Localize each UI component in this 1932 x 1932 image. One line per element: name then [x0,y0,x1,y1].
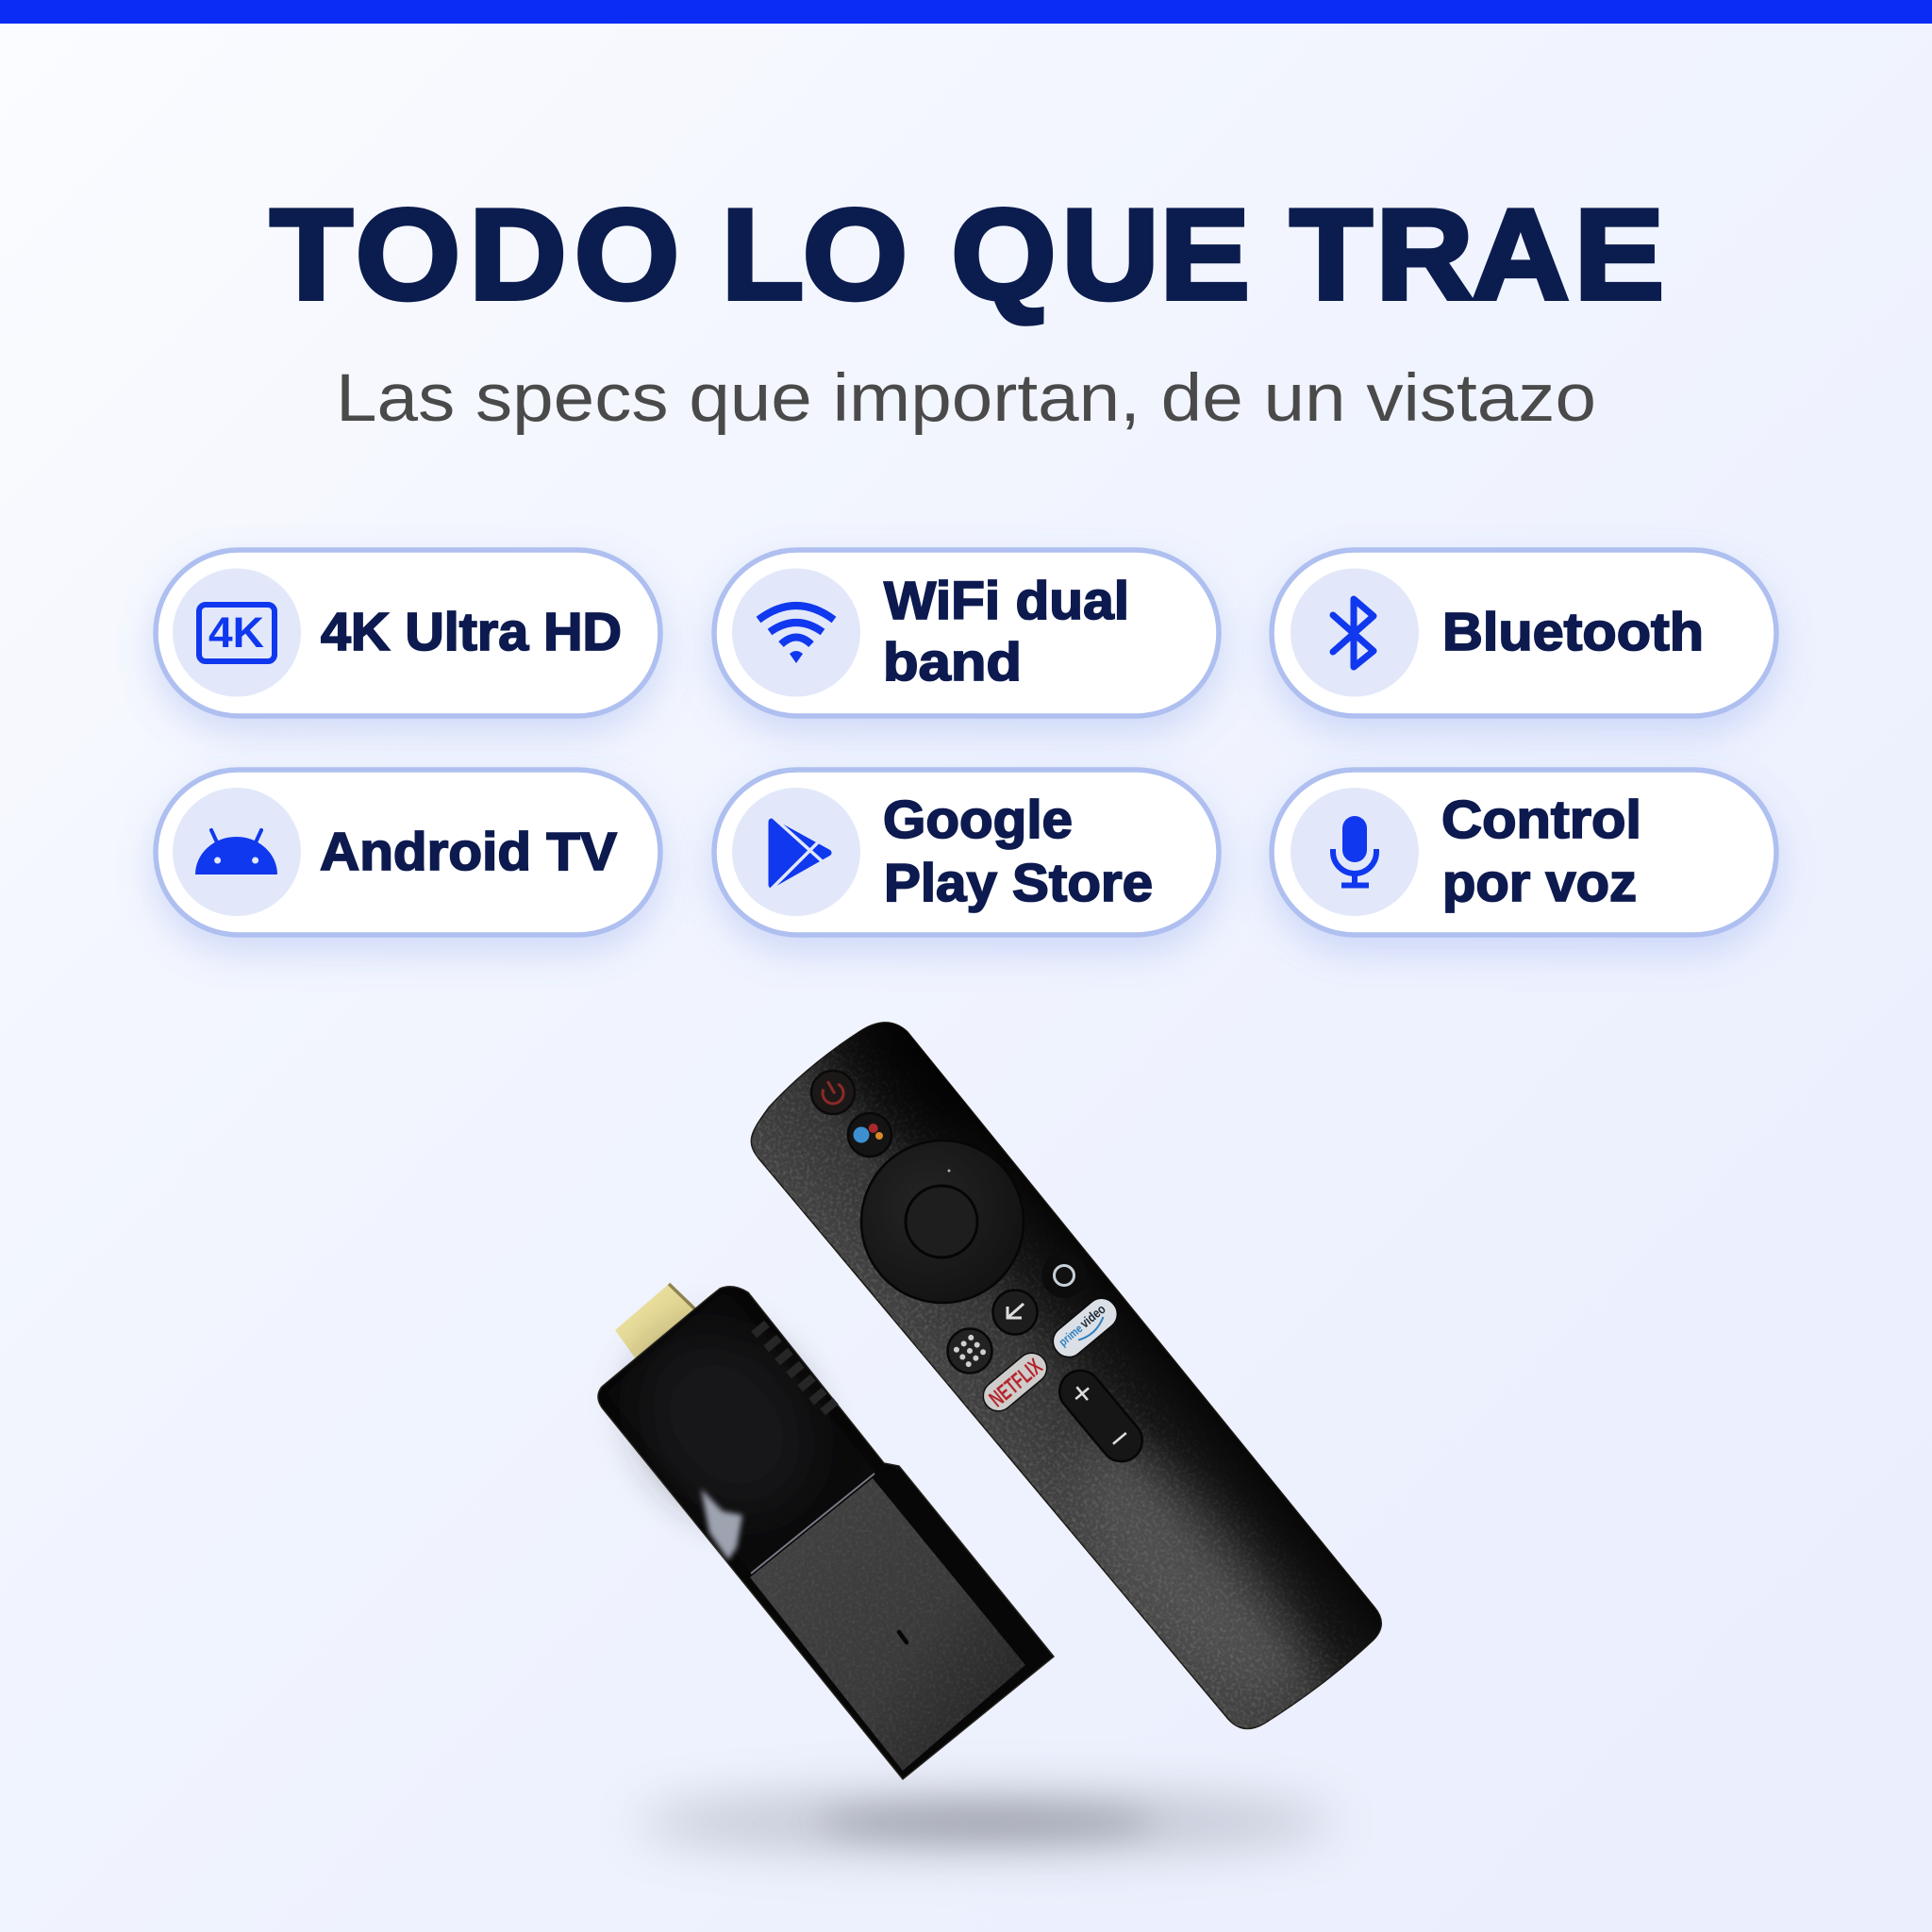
icon circle [1291,568,1419,696]
glossy top face [608,1294,875,1574]
icon: wifi [758,606,834,663]
volume rocker [1051,1362,1151,1470]
icon circle [732,568,860,696]
remote control [751,1022,1382,1730]
icon: 4K [199,605,275,661]
netflix button [977,1347,1053,1417]
panel: Control por voz pill [1272,770,1776,935]
label: Bluetooth: Bluetooth [1442,602,1704,662]
floor shadow [637,1790,1335,1855]
subtitle: Las specs que importan, de un vistazo [336,361,1596,436]
label: WiFi dual band: WiFi dual [884,571,1129,631]
top accent bar [0,0,1932,24]
label: Control por voz: por voz [1442,853,1637,913]
panel: WiFi dual band pill [714,550,1219,716]
icon circle [173,568,301,696]
label: Google Play Store: Google [883,790,1073,850]
d-pad [861,1141,1024,1303]
label: 4K Ultra HD: 4K Ultra HD [321,602,622,662]
icon circle [173,788,301,916]
label: WiFi dual band [883,571,1129,692]
pill background [1272,770,1776,935]
vent slots [751,1321,839,1415]
pill background [156,550,660,716]
label: Android TV: Android TV [320,822,617,882]
icon circle [732,788,860,916]
assistant button [848,1113,891,1157]
apps button [947,1328,992,1374]
status LED [899,1632,907,1642]
label: Control por voz [1441,790,1641,913]
power button [811,1071,855,1114]
label: Google Play Store: Play Store [884,853,1153,913]
panel: 4K Ultra HD pill [156,550,660,716]
icon: 4K: 4K [208,608,265,657]
prime video button: video [1077,1301,1108,1331]
icon: android [195,830,277,874]
panel: Bluetooth pill [1272,550,1776,716]
stick body [598,1287,1054,1779]
panel: Google Play Store pill [714,770,1219,935]
prime video button [1047,1292,1124,1363]
matte lower face [750,1478,1025,1771]
label: WiFi dual band: band [883,632,1022,692]
pill background [714,550,1219,716]
home button [1041,1253,1087,1298]
icon: bluetooth [1333,599,1374,667]
icon: play store [771,815,828,890]
panel: Android TV pill [156,770,660,935]
pill background [1272,550,1776,716]
icon: microphone [1333,816,1376,885]
remote body [751,1022,1382,1730]
streaming stick [598,1284,1054,1783]
netflix button: NETFLIX [985,1354,1047,1412]
label: Google Play Store [883,790,1153,913]
prime video button: prime [1057,1322,1085,1349]
icon circle [1291,788,1419,916]
pill background [714,770,1219,935]
HDMI connector [615,1284,695,1360]
label: Control por voz: Control [1441,790,1641,850]
back button [992,1291,1038,1334]
title: TODO LO QUE TRAE [270,183,1664,326]
pill background [156,770,660,935]
